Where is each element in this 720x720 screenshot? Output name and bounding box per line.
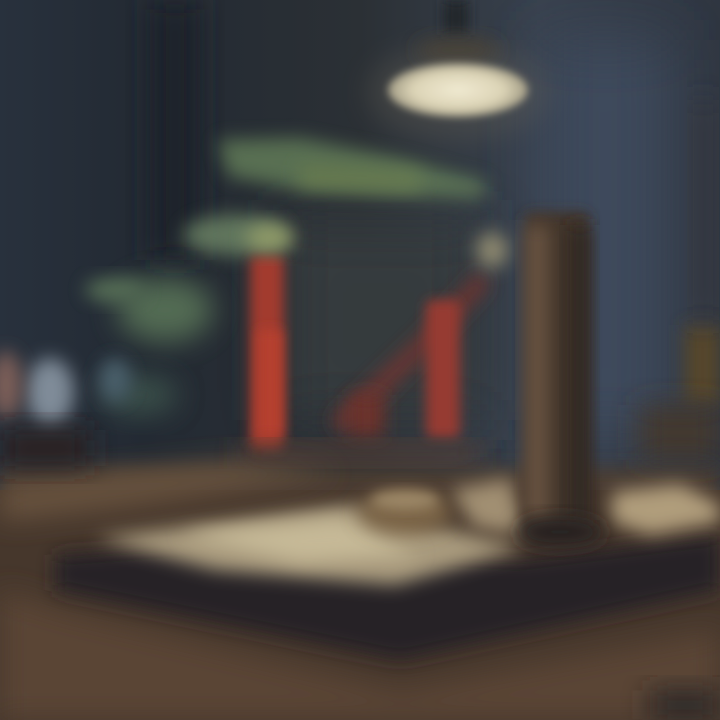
table surface <box>0 462 720 720</box>
left objects <box>0 351 131 466</box>
background wall <box>116 0 720 470</box>
red bar left <box>246 224 294 450</box>
pendant lamp <box>368 0 548 140</box>
right background object <box>628 312 720 464</box>
wooden post <box>516 212 604 546</box>
cream paper <box>95 478 720 585</box>
green trend band <box>85 138 488 415</box>
small bowl <box>359 490 451 534</box>
red bar right and rising line <box>240 232 508 461</box>
dark board <box>55 535 720 660</box>
